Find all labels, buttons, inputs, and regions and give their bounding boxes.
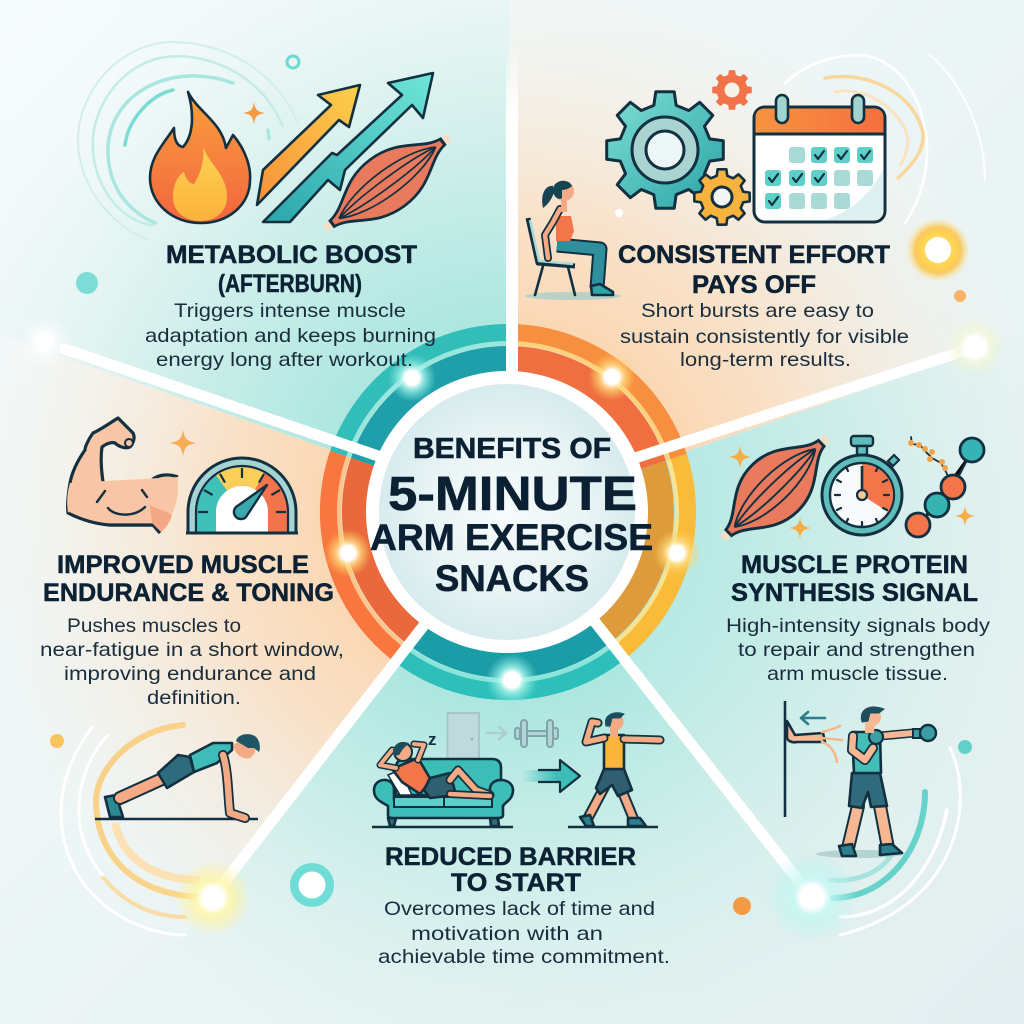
body text: near-fatigue in a short window, xyxy=(40,639,344,661)
white dividers xyxy=(65,45,970,885)
icon: wall push arm xyxy=(785,701,842,817)
heading: REDUCED BARRIER xyxy=(385,843,636,871)
icon: dumbbell xyxy=(515,720,558,747)
body text: improving endurance and xyxy=(64,663,316,685)
decorative arcs: top-right xyxy=(785,55,985,223)
heading: TO START xyxy=(451,869,581,897)
icon: push-up figure xyxy=(95,734,260,819)
center title: 5-MINUTE xyxy=(388,468,637,521)
icon: small orange gear xyxy=(712,70,752,110)
icon: large gear xyxy=(607,92,723,208)
heading: ENDURANCE & TONING xyxy=(43,579,334,607)
panel background: top-left xyxy=(0,0,510,512)
center title: ARM EXERCISE xyxy=(370,517,653,558)
heading xyxy=(43,551,334,607)
icon: rising yellow arrow xyxy=(257,85,360,205)
icon: sparkles xyxy=(729,446,975,539)
body text: Short bursts are easy to xyxy=(641,300,874,322)
body text: adaptation and keeps burning xyxy=(145,325,436,347)
decorative arcs: bottom-left xyxy=(61,725,205,935)
icon: woman doing chair dips xyxy=(525,181,621,300)
body text xyxy=(378,898,670,968)
panel background: left xyxy=(0,335,510,1024)
icon: flexed arm xyxy=(67,418,178,533)
body text: sustain consistently for visible xyxy=(620,326,909,348)
body text: achievable time commitment. xyxy=(378,946,670,968)
icon: door xyxy=(448,713,479,759)
heading: MUSCLE PROTEIN xyxy=(741,551,968,579)
body text: to repair and strengthen xyxy=(738,639,975,661)
heading: SYNTHESIS SIGNAL xyxy=(731,579,978,607)
body text xyxy=(620,300,909,371)
icon: active man xyxy=(568,713,660,827)
heading xyxy=(618,241,890,299)
icon: rising teal arrow xyxy=(263,73,433,222)
icon: stopwatch xyxy=(822,436,902,535)
center title xyxy=(370,433,653,599)
center title: BENEFITS OF xyxy=(413,433,611,465)
icon: motion arrow xyxy=(522,760,580,792)
body text: Pushes muscles to xyxy=(67,615,241,637)
central white disc xyxy=(366,371,648,653)
icon: muscle xyxy=(308,114,467,252)
icon: small yellow gear xyxy=(694,169,750,225)
icon: sparkle xyxy=(170,430,196,456)
body text: long-term results. xyxy=(680,349,851,371)
icon: faint arrow xyxy=(487,727,506,739)
body text: motivation with an xyxy=(411,923,603,945)
heading xyxy=(166,241,417,298)
icon: couch with resting man xyxy=(372,742,513,827)
panel: metabolic boost xyxy=(145,73,467,371)
heading: PAYS OFF xyxy=(692,271,816,299)
panel: reduced barrier xyxy=(372,713,670,968)
icon: sparkle xyxy=(243,102,265,124)
heading xyxy=(731,551,978,607)
body text xyxy=(145,300,436,371)
body text: arm muscle tissue. xyxy=(767,663,948,685)
ring glow nodes xyxy=(324,353,701,706)
icon: muscle xyxy=(700,414,850,562)
body text: Overcomes lack of time and xyxy=(384,898,655,920)
heading: IMPROVED MUSCLE xyxy=(57,551,309,579)
panel: muscle protein synthesis xyxy=(700,414,990,858)
heading: (AFTERBURN) xyxy=(218,270,362,298)
decorative arcs: bottom-right xyxy=(830,748,960,935)
panel background: top-right xyxy=(510,0,1024,512)
central light disc xyxy=(379,384,635,640)
body text: energy long after workout. xyxy=(156,349,413,371)
body text xyxy=(726,615,990,685)
icon: gauge xyxy=(186,458,298,533)
icon: boxer xyxy=(816,707,936,858)
icon: calendar xyxy=(754,95,885,222)
icon: flame xyxy=(150,92,250,223)
panel background: bottom xyxy=(117,512,912,1024)
heading: METABOLIC BOOST xyxy=(166,241,417,269)
center title: SNACKS xyxy=(435,558,589,599)
decorative arcs: top-left xyxy=(78,42,298,240)
body text: High-intensity signals body xyxy=(726,615,990,637)
central ring segments xyxy=(329,333,687,691)
body text: Triggers intense muscle xyxy=(174,300,406,322)
body text xyxy=(40,615,344,709)
panel: consistent effort xyxy=(525,70,909,371)
heading xyxy=(385,843,636,897)
icon: sleep z: z xyxy=(428,730,436,749)
icon: molecule chain xyxy=(906,437,984,537)
panel: improved muscle endurance xyxy=(40,418,344,819)
body text: definition. xyxy=(147,687,241,709)
heading: CONSISTENT EFFORT xyxy=(618,241,890,269)
panel background: right xyxy=(510,335,1024,1024)
